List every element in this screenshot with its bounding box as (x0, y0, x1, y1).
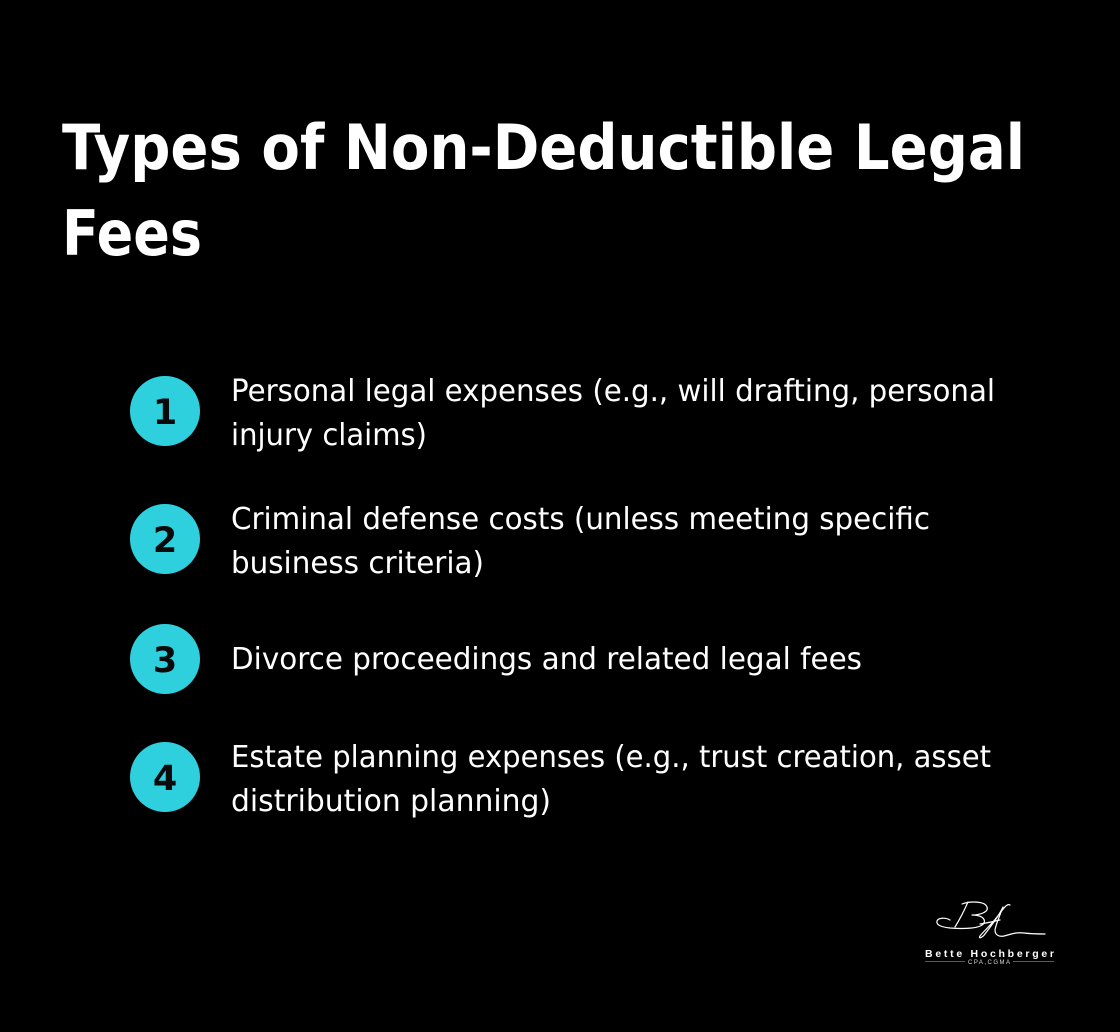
list item 4 (130, 740, 991, 819)
signature mark (937, 902, 1045, 938)
logo credentials: CPA,CGMA (968, 960, 1010, 966)
number badge 1: 1 (153, 393, 177, 433)
item 4 text: distribution planning) (231, 784, 551, 819)
number badge 2: 2 (153, 521, 177, 561)
number badge 3 (130, 624, 200, 694)
number badge 4 (130, 742, 200, 812)
list item 2 (130, 502, 930, 581)
item 3 text: Divorce proceedings and related legal fees (231, 642, 862, 677)
list item 1 (130, 374, 995, 453)
item 1 text: injury claims) (231, 418, 427, 453)
number badge 3: 3 (153, 641, 177, 681)
list item 3 (130, 624, 862, 694)
item 1 text (231, 374, 995, 453)
item 4 text: Estate planning expenses (e.g., trust creation, asset (231, 740, 991, 775)
logo name: Bette Hochberger (925, 948, 1054, 960)
item 2 text: business criteria) (231, 546, 484, 581)
title (62, 111, 1025, 270)
title: Types of Non-Deductible Legal (62, 111, 1025, 184)
title: Fees (62, 197, 202, 270)
logo: Bette Hochberger signature (925, 902, 1054, 966)
item 2 text: Criminal defense costs (unless meeting specific (231, 502, 930, 537)
number badge 2 (130, 504, 200, 574)
number badge 4: 4 (153, 759, 177, 799)
item 1 text: Personal legal expenses (e.g., will drafting, personal (231, 374, 995, 409)
item 4 text (231, 740, 991, 819)
number badge 1 (130, 376, 200, 446)
item 2 text (231, 502, 930, 581)
